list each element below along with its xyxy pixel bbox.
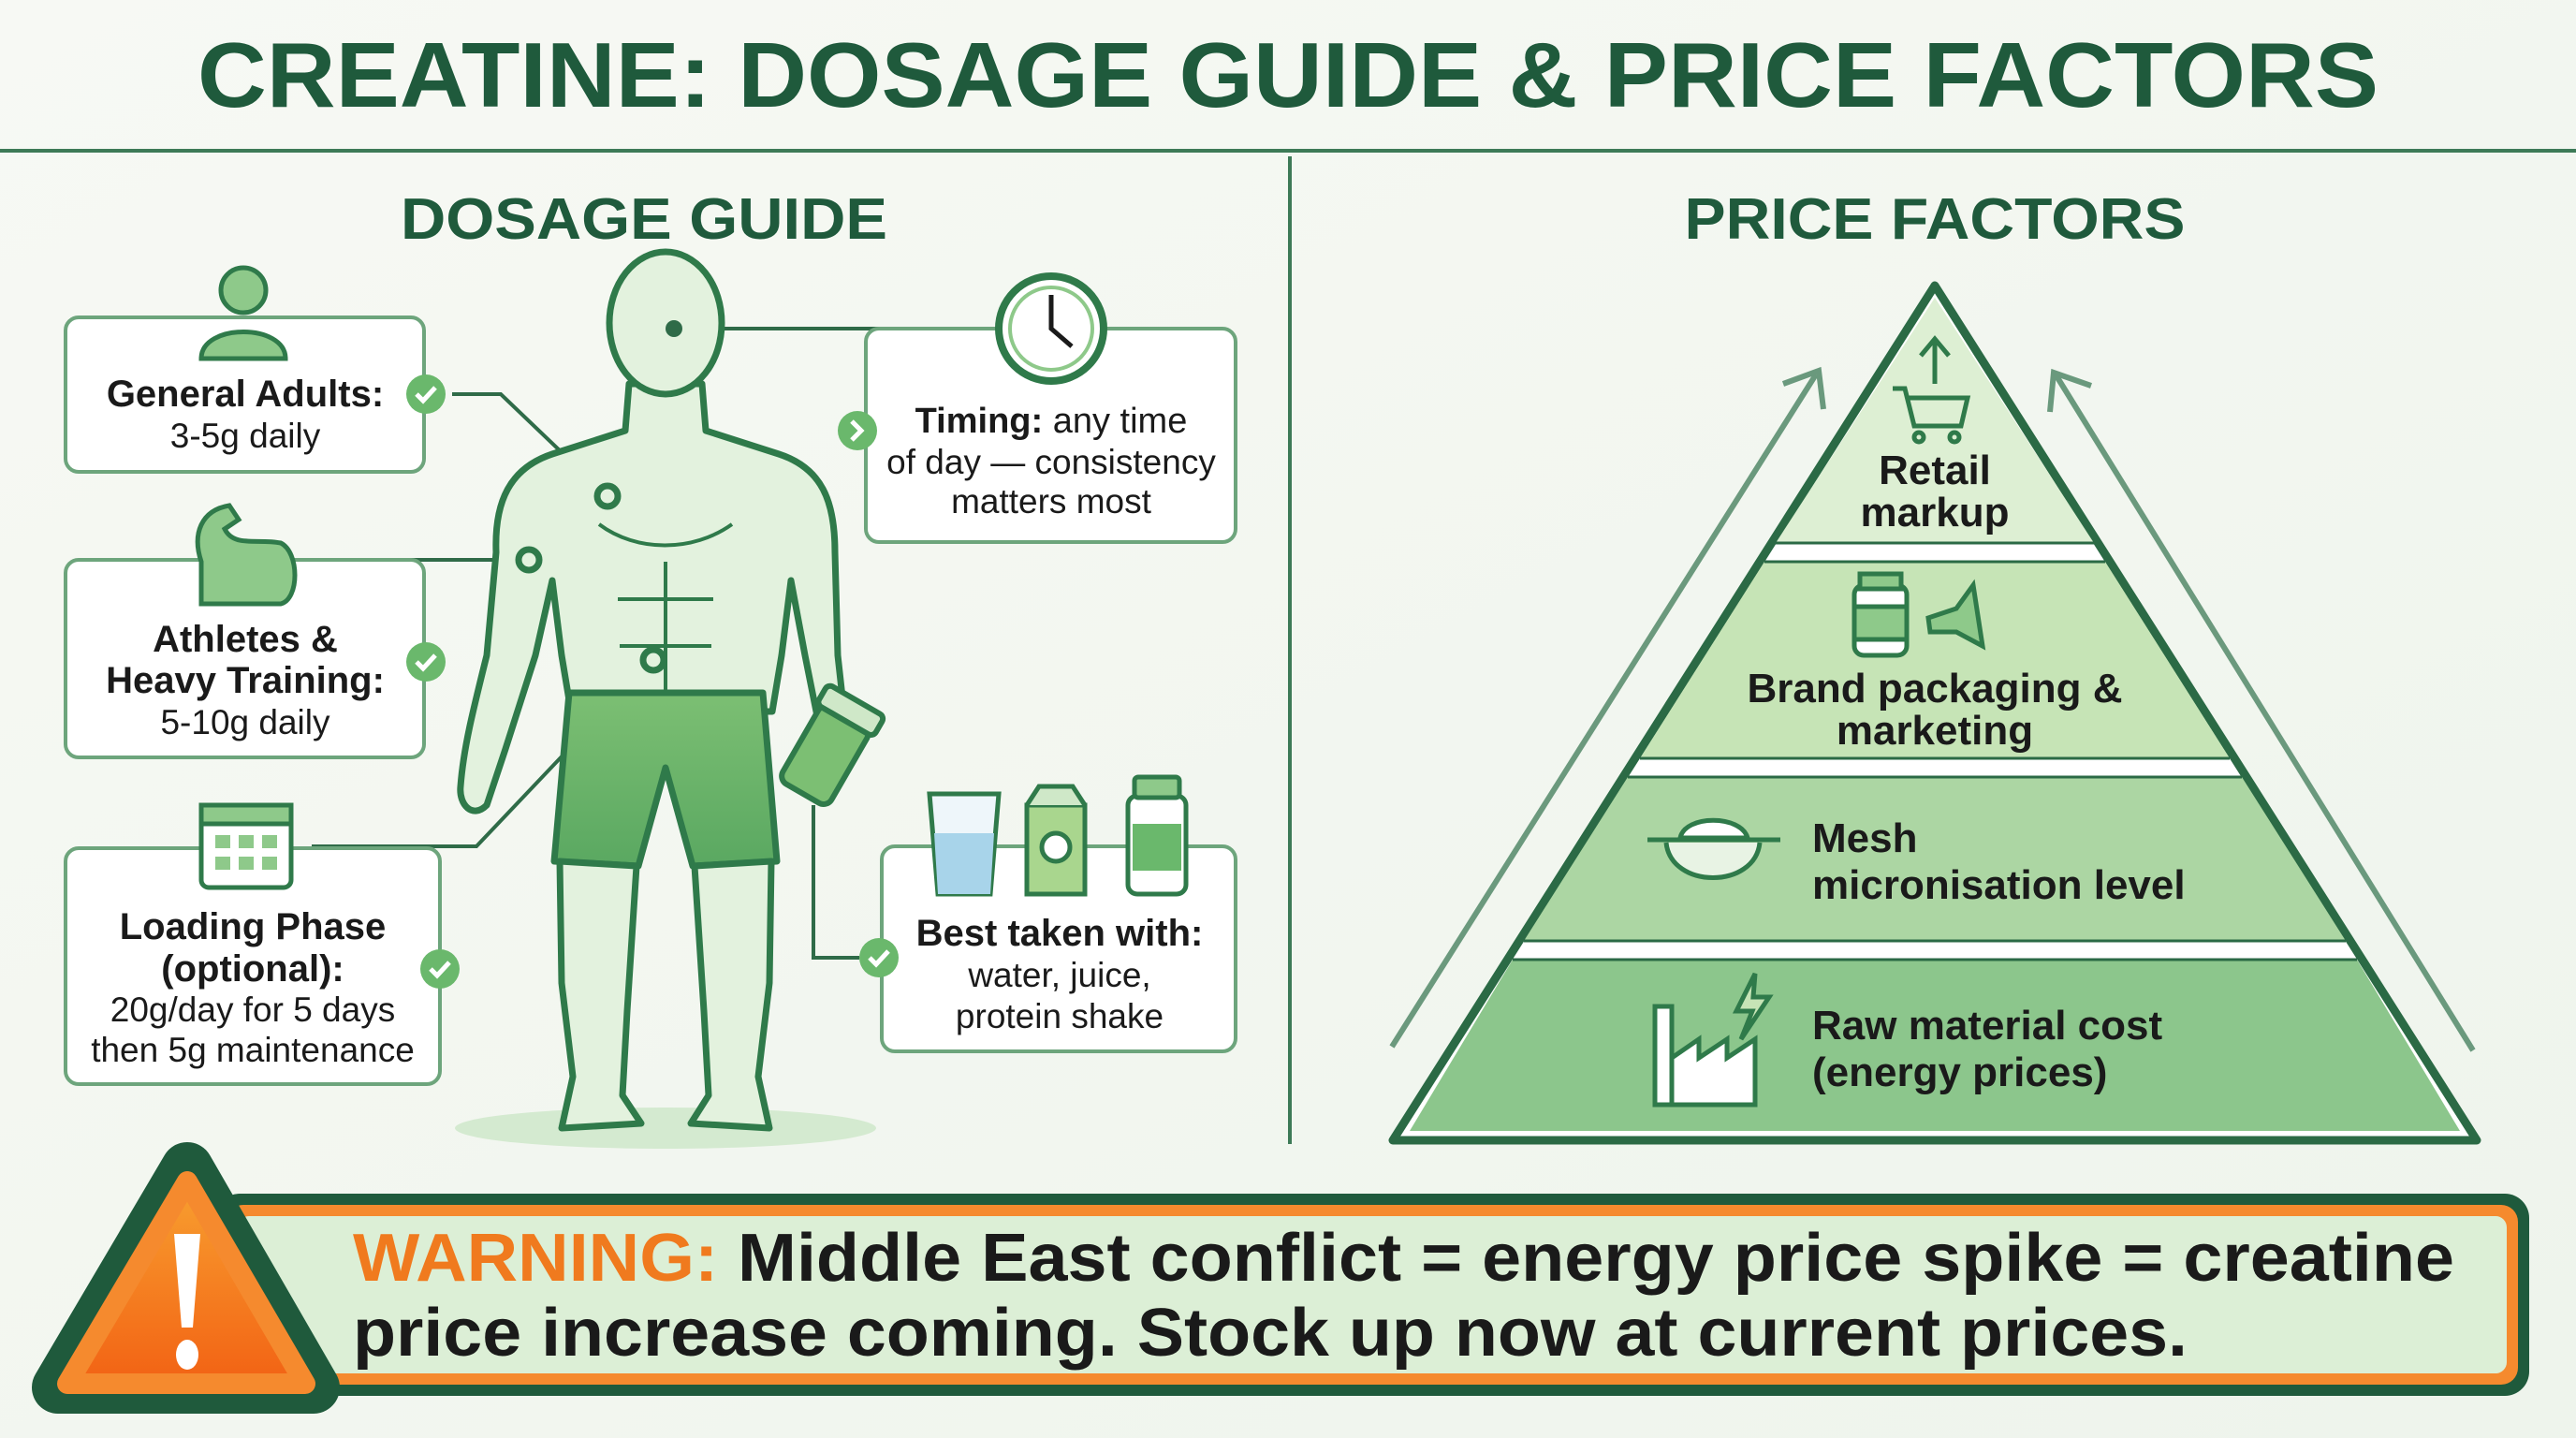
panel: general adults: 3-5g daily <box>170 417 321 455</box>
check <box>838 411 877 450</box>
arrow: left up <box>1392 371 1823 1047</box>
warning banner: WARNING: Middle East conflict = energy price spike = creatine <box>353 1221 2454 1296</box>
panel: best taken with: Best taken with: <box>916 913 1203 954</box>
arrow: right up <box>2050 373 2473 1050</box>
layer: mesh micronisation <box>1524 777 2346 941</box>
panel: best taken with <box>859 777 1236 1051</box>
panel: timing: matters most <box>951 482 1152 521</box>
icon: bicep <box>198 506 295 604</box>
panel: general adults <box>66 268 446 472</box>
layer: brand packaging: Brand packaging & <box>1748 666 2122 712</box>
panel: timing: Timing: any time <box>915 402 1187 441</box>
layer: retail markup: markup <box>1861 490 2009 536</box>
layer: raw material <box>1410 960 2460 1131</box>
panel: athletes: Athletes & <box>153 619 338 660</box>
pyramid <box>1393 286 2477 1140</box>
icon: warning triangle <box>58 1168 314 1387</box>
panel: best taken with: water, juice, <box>967 956 1151 994</box>
warning banner <box>215 1194 2529 1396</box>
layer: raw material: Raw material cost <box>1812 1003 2162 1049</box>
check <box>859 938 899 977</box>
check <box>406 374 446 414</box>
title: CREATINE: DOSAGE GUIDE & PRICE FACTORS <box>198 23 2378 126</box>
panel: athletes: 5-10g daily <box>160 703 330 741</box>
panel: loading phase: then 5g maintenance <box>91 1031 415 1069</box>
warning banner: price increase coming. Stock up now at current prices. <box>353 1296 2188 1371</box>
layer: mesh micronisation: Mesh <box>1812 815 1917 861</box>
body figure <box>455 252 876 1149</box>
panel: athletes: Heavy Training: <box>106 660 385 701</box>
icon: glass, juice, bottle <box>929 777 1186 894</box>
layer: brand packaging: marketing <box>1837 708 2033 754</box>
layer: retail markup <box>1776 298 2094 543</box>
icon: clock <box>999 276 1104 381</box>
layer: mesh micronisation: micronisation level <box>1812 862 2186 908</box>
icon: jar and megaphone <box>1854 574 1983 655</box>
panel: loading phase: Loading Phase <box>120 906 386 947</box>
panel: general adults: General Adults: <box>107 374 384 415</box>
heading: price factors: PRICE FACTORS <box>1685 187 2185 252</box>
icon: factory <box>1655 974 1769 1105</box>
check <box>406 642 446 682</box>
panel: timing <box>838 276 1236 542</box>
icon: sieve <box>1647 820 1780 878</box>
panel: loading phase <box>66 805 460 1084</box>
panel: loading phase: (optional): <box>161 948 344 990</box>
connector lines <box>312 329 994 958</box>
layer: retail markup: Retail <box>1879 448 1991 493</box>
icon: person <box>201 268 285 359</box>
icon: calendar <box>201 805 291 888</box>
heading: dosage guide: DOSAGE GUIDE <box>401 187 887 252</box>
layer: raw material: (energy prices) <box>1812 1049 2107 1095</box>
layer: brand packaging <box>1640 562 2230 758</box>
panel: loading phase: 20g/day for 5 days <box>110 990 395 1029</box>
panel: athletes <box>66 506 446 757</box>
icon: shaker <box>774 684 885 810</box>
panel: best taken with: protein shake <box>956 997 1164 1035</box>
icon: cart <box>1893 339 1968 442</box>
panel: timing: of day — consistency <box>886 443 1216 481</box>
check <box>420 949 460 989</box>
